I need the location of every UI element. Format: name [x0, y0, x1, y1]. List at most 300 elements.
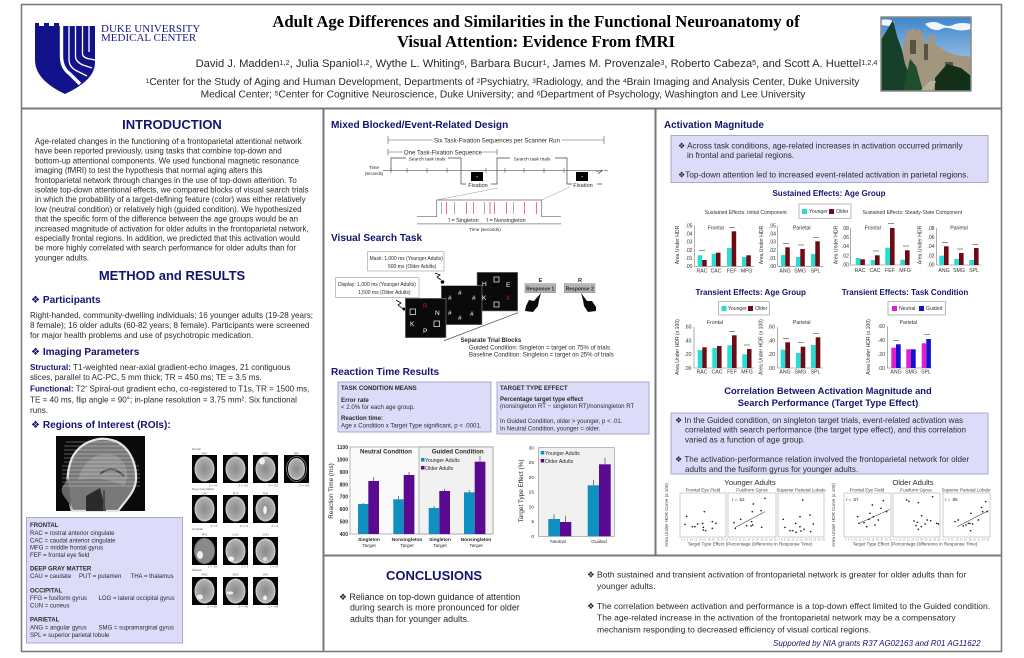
panel: ROI glossary: SPL = superior parietal lobule [30, 633, 110, 639]
display frame: search display: R [423, 304, 428, 310]
bar chart: sustained initial frontal: .00 [685, 264, 693, 270]
heading: transient task condition: Transient Effects: Task Condition [842, 288, 968, 297]
bar chart: transient frontal: MFG [741, 370, 753, 376]
group: frontal scans: Z = +31 [268, 484, 278, 488]
bar chart: sustained steady-state frontal: FEF [885, 268, 895, 274]
legend: younger older: Older [836, 209, 849, 215]
bar chart: sustained initial parietal: Area Under HDR [759, 225, 765, 264]
panel: task condition means: TASK CONDITION MEANS [341, 385, 417, 392]
bar chart: reaction time: Guided Condition [432, 448, 484, 456]
bar chart: reaction time: 900 [340, 470, 348, 476]
group: parietal scans: ANG [201, 573, 208, 577]
text block: imaging parameters: Structural: T1-weighted near-axial gradient-echo images, 21 contiguous [30, 363, 290, 372]
heading: visual search task: Visual Search Task [331, 233, 422, 244]
panel: ROI glossary: OCCIPITAL [30, 588, 62, 594]
heading: reaction time results: Reaction Time Results [331, 367, 439, 378]
bar chart: reaction time: Older Adults [425, 466, 454, 472]
text block: imaging parameters: Functional: T2* Spiral-out gradient echo, co-registered to T1s, TR = 1500 ms, [30, 384, 309, 394]
bar chart: reaction time: 500 [340, 520, 348, 526]
group: deep gray matter scans: CAU [202, 492, 207, 496]
panel: ROI glossary: PARIETAL [30, 618, 60, 624]
bar chart: sustained initial parietal: SMG [794, 269, 806, 275]
bar chart: reaction time: Neutral Condition [360, 448, 412, 456]
chart titles: scatter groups: Older Adults [892, 478, 934, 487]
bar chart: transient parietal task condition: .00 [878, 366, 885, 372]
bar chart: sustained steady-state parietal: SPL [969, 268, 979, 274]
group: frontal scans: FEF [294, 451, 299, 455]
bar chart: reaction time: Target [362, 543, 376, 549]
bar chart: sustained initial parietal: .05 [769, 224, 776, 230]
text block: introduction [35, 137, 309, 262]
panel: ROI glossary: CAU = caudate [30, 574, 72, 580]
panel: target type effect: (nonsingleton RT − singleton RT)/nonsingleton RT [500, 404, 634, 410]
panel: ROI glossary: CAC = caudal anterior cingulate [30, 538, 116, 544]
heading: sustained effects: Sustained Effects: Age Group [772, 189, 886, 198]
icon: left hand pressing [525, 293, 541, 312]
bar chart: sustained initial frontal: .05 [685, 224, 693, 230]
heading: introduction: INTRODUCTION [122, 117, 222, 132]
text block: imaging parameters: TE = 40 ms, flip angle = 90°; in-plane resolution = 3.75 mm2. Six functional [30, 396, 297, 404]
panel: ROI glossary: FEF = frontal eye field [30, 553, 89, 559]
bar chart: target type effect: 5 [531, 519, 534, 525]
icon: right hand pressing [581, 293, 596, 312]
bar chart: sustained initial frontal [675, 224, 754, 275]
chart titles: scatter groups: Younger Adults [724, 478, 776, 487]
heading: correlation: Search Performance (Target Type Effect) [738, 397, 918, 408]
bar chart: transient parietal age: .40 [768, 338, 775, 344]
legend: transient task condition: Neutral [899, 306, 915, 312]
diagram: visual search task sequence: Response 1 [526, 286, 555, 292]
diagram: visual search task sequence [336, 252, 614, 358]
diagram: mixed blocked event-related timeline: Time [369, 165, 379, 170]
diagram: visual search task sequence: 500 ms (Older Adults) [388, 264, 437, 270]
bar chart: transient frontal [675, 319, 754, 376]
text block: conclusions left: ❖ Reliance on top-down guidance of attention [339, 592, 520, 602]
bar chart: target type effect: Neutral [550, 539, 566, 545]
panel: task condition means: < 2.0% for each age group. [341, 404, 415, 411]
bar chart: transient frontal: .00 [684, 366, 692, 372]
heading: correlation [724, 385, 932, 408]
bar chart: reaction time: Nonsingleton [461, 537, 491, 543]
bar chart: sustained steady-state parietal: .06 [927, 235, 935, 241]
bar chart: sustained initial parietal: ANG [779, 269, 791, 275]
panel: ROI glossary: DEEP GRAY MATTER [30, 566, 92, 572]
legend: transient age group: Older [755, 306, 768, 312]
bar chart: sustained initial parietal: .04 [769, 232, 776, 238]
scatter plots: younger adults: Target Type Effect (Percentage Difference in Response Time) [688, 542, 813, 546]
text block: conclusions right: The age-related increase in the activation of the frontoparietal network may be a compensatory [597, 612, 956, 622]
bar chart: reaction time: Target [469, 543, 483, 549]
bar chart: transient frontal: Area Under HDR (x 100) [675, 319, 681, 375]
bar chart: sustained initial frontal: RAC [697, 269, 708, 275]
bar chart: transient parietal age: ANG [779, 370, 791, 376]
group: frontal scans: Z = +33 [238, 484, 248, 488]
heading: regions of interest: ❖ Regions of Interest (ROIs): [31, 420, 171, 431]
bar chart: sustained steady-state parietal [918, 225, 981, 274]
diagram: mixed blocked event-related timeline: + [476, 174, 479, 179]
bar chart: transient parietal task condition: SMG [905, 370, 917, 376]
text block: conclusions left [339, 592, 520, 624]
diagram: mixed blocked event-related timeline: ↿= Singleton [447, 218, 479, 224]
title: Adult Age Differences and Similarities in the Functional Neuroanatomy of [272, 12, 800, 31]
panel: ROI glossary: RAC = rostral anterior cingulate [30, 531, 115, 537]
text block: introduction: have been reported previously, using tasks that combine top-down and [35, 147, 282, 156]
bar chart: transient parietal age: SMG [795, 370, 806, 376]
group: deep gray matter scans [192, 487, 278, 528]
callout: activation summary: in frontal and parietal regions. [687, 151, 794, 160]
callout: correlation summary: ❖ In the Guided condition, on singleton target trials, event-related activation was [675, 416, 963, 425]
diagram: visual search task sequence: Display: 1,000 ms (Younger Adults) [338, 282, 416, 288]
bar chart: sustained initial parietal: Parietal [793, 226, 810, 232]
group: parietal scans: Parietal [192, 568, 202, 572]
bar chart: sustained initial frontal: MFG [741, 269, 752, 275]
panel: target type effect: TARGET TYPE EFFECT [500, 385, 568, 392]
legend: transient age group [719, 302, 769, 315]
text block: conclusions right: ❖ Both sustained and transient activation of frontoparietal network is greater for older adults than for [587, 570, 966, 580]
bar chart: transient parietal age: Area Under HDR (x 100) [759, 319, 765, 375]
bar chart: sustained steady-state frontal: .08 [842, 226, 849, 232]
brain scan grid [192, 447, 309, 609]
bar chart: sustained steady-state parietal: .00 [927, 263, 935, 269]
bar chart: sustained steady-state parietal: .08 [927, 226, 935, 232]
bar chart: transient parietal age: SPL [811, 370, 821, 376]
bar chart: transient parietal task condition: .20 [878, 352, 885, 358]
text block: introduction: younger adults. [35, 253, 89, 262]
bar chart: reaction time: Younger Adults [425, 458, 460, 464]
scatter plots: younger adults: r = .52 [732, 497, 745, 502]
group: deep gray matter scans: THA [263, 492, 268, 496]
icon: Duke shield logo [35, 22, 95, 94]
text block: introduction: especially frontal regions. In addition, we predicted that this activation would [35, 234, 300, 243]
authors: David J. Madden1,2, Julia Spaniol1,2, Wythe L. Whiting6, Barbara Bucur1, James M. Provenzale3, Roberto Cabeza5, and Scott A. Huettel1,2,4 [196, 58, 877, 70]
group: deep gray matter scans: Z = 6 [272, 524, 278, 528]
image: sagittal MRI with slice lines [56, 436, 145, 511]
panel: ROI glossary: ANG = angular gyrus [30, 626, 87, 632]
diagram: mixed blocked event-related timeline [365, 136, 608, 232]
logo text: DUKE UNIVERSITY [101, 23, 200, 35]
callout: activation summary: ❖Top-down attention led to increased event-related activation in parietal regions. [678, 170, 968, 180]
text block: introduction: in which the probability of a target-defining feature (color) was either relatively [35, 195, 306, 204]
bar chart: target type effect: Older Adults [545, 459, 574, 465]
bar chart: target type effect: Target Type Effect (%) [518, 460, 525, 522]
panel: header [35, 12, 971, 100]
heading: transient age group: Transient Effects: Age Group [696, 288, 806, 297]
bar chart: reaction time: Target [400, 543, 414, 549]
bar chart: transient parietal age: .20 [768, 352, 775, 358]
bar chart: transient frontal: FEF [727, 370, 737, 376]
scatter plots: older adults: 4 6 8 10 12 14 16 18 20 22 24 26 4 6 8 10 12 14 16 18 20 22 24 26 4 6 8 10 12 14 16 18 20 22 24 26 [845, 538, 990, 542]
callout: activation summary: ❖ Across task conditions, age-related increases in activation occurred primarily [678, 142, 963, 150]
display frame: third [477, 272, 518, 311]
bar chart: sustained initial frontal: .02 [685, 248, 693, 254]
group: parietal scans: SMG [232, 573, 239, 577]
group: deep gray matter scans: PUT [233, 492, 239, 496]
group: frontal scans: CAC [233, 451, 238, 455]
bar chart: target type effect: 0 [531, 534, 534, 540]
text block: imaging parameters: runs. [30, 406, 48, 415]
affiliations: Medical Center; 5Center for Cognitive Neuroscience, Duke University; and 6Department of Psychology, Washington and Lee University [201, 90, 806, 100]
group: deep gray matter scans: Deep Gray Matter [192, 487, 214, 491]
group: occipital scans: LOG [233, 532, 238, 536]
chart labels: sustained components: Sustained Effects: Initial Component [705, 210, 787, 216]
text block: conclusions left: during search is more pronounced for older [350, 602, 520, 612]
diagram: mixed blocked event-related timeline: (seconds) [365, 171, 384, 176]
group: parietal scans: Z = +45 [268, 605, 278, 609]
bar chart: transient frontal: .20 [684, 352, 692, 358]
panel: ROI glossary: LOG = lateral occipital gyrus [98, 596, 175, 602]
panel: conclusions [339, 568, 990, 648]
panel: right column [664, 120, 991, 547]
title: Visual Attention: Evidence From fMRI [397, 32, 675, 51]
scatter plots: younger adults [664, 483, 826, 547]
bar chart: sustained steady-state parietal: ANG [938, 268, 950, 274]
diagram: visual search task sequence: Mask: 1,000 ms (Younger Adults) [370, 256, 443, 262]
group: occipital scans: Z = +6 [270, 564, 278, 568]
text block: participants [30, 311, 313, 340]
bar chart: sustained steady-state frontal: Frontal [865, 226, 881, 232]
bar chart: sustained steady-state frontal: Area Under HDR [834, 225, 840, 264]
diagram: mixed blocked event-related timeline: One Task-Fixation Sequence [404, 150, 483, 156]
text block: introduction: low (neutral condition) or relatively high (guided condition). We hypothesized [35, 205, 302, 214]
bar chart: transient parietal task condition: ANG [890, 370, 902, 376]
bar chart: sustained steady-state frontal [834, 224, 911, 274]
bar chart: sustained steady-state frontal: .02 [842, 254, 849, 260]
display frame: search display: K [410, 321, 415, 328]
bar chart: target type effect: 20 [529, 475, 534, 481]
bar chart: transient frontal: RAC [697, 370, 708, 376]
bar chart: transient frontal: .60 [684, 324, 692, 330]
panel: task condition means: Reaction time: [341, 415, 383, 422]
scatter plots: older adults: Frontal Eye Field [850, 488, 885, 492]
bar chart: sustained steady-state parietal: Area Under HDR [918, 225, 924, 264]
bar chart: sustained initial frontal: CAC [711, 269, 722, 275]
legend: transient task condition: Guided [926, 306, 943, 312]
group: occipital scans [192, 527, 278, 568]
diagram: visual search task sequence: E [539, 278, 543, 284]
scatter plots: older adults: Superior Parietal Lobule [941, 488, 991, 492]
scatter plots: younger adults: 4 6 8 10 12 14 16 18 20 22 24 26 4 6 8 10 12 14 16 18 20 22 24 26 4 6 8 10 12 14 16 18 20 22 24 26 [681, 538, 826, 542]
heading: correlation: Correlation Between Activation Magnitude and [724, 385, 932, 396]
group: frontal scans [192, 447, 309, 488]
text block: introduction: imaging (fMRI) to test the hypothesis that normal aging alters this [35, 166, 263, 175]
bar chart: sustained initial parietal: .01 [769, 256, 776, 262]
affiliations [146, 77, 860, 100]
group: frontal scans: Z = +9 [209, 484, 217, 488]
callout: correlation summary: correlated with search performance (the target type effect), and this correlation [685, 426, 966, 434]
legend: younger older: Younger [809, 209, 828, 215]
scatter plots: older adults: r = .57 [846, 497, 859, 502]
bar chart: sustained initial parietal: SPL [811, 269, 821, 275]
bar chart: sustained initial parietal [759, 224, 823, 275]
callout: activation summary [671, 136, 988, 182]
bar chart: sustained steady-state parietal: .04 [927, 244, 935, 250]
text block: conclusions right: ❖ The correlation between activation and performance is a top-down effect limited to the Guided condition. [587, 601, 990, 611]
display frame: mask [441, 286, 482, 325]
group: parietal scans [192, 568, 278, 609]
diagram: mixed blocked event-related timeline: Fixation [573, 183, 593, 189]
bar chart: transient parietal age: .60 [768, 324, 775, 330]
bar chart: sustained initial frontal: FEF [727, 269, 737, 275]
legend: transient age group: Younger [728, 306, 747, 312]
bar chart: sustained initial frontal: Frontal [708, 226, 724, 232]
display frame: search display: N [435, 310, 440, 317]
display frame: third: K [482, 295, 487, 302]
panel: left column [26, 117, 313, 643]
panel: ROI glossary: THA = thalamus [130, 574, 174, 580]
text block: introduction: isolate top-down attentional effects, we compared blocks of visual search trials [35, 186, 309, 194]
group: parietal scans: Z = +50 [207, 605, 217, 609]
diagram: mixed blocked event-related timeline: Six Task-Fixation Sequences per Scanner Run [434, 138, 560, 144]
panel: middle column [328, 120, 649, 549]
scatter plots: younger adults: Area Under HDR Curve (x 100) [664, 483, 669, 547]
bar chart: sustained initial frontal: Area Under HDR [675, 225, 681, 264]
scatter plots: younger adults: Fusiform Gyrus [736, 488, 768, 492]
display frame: mask: # [448, 295, 452, 302]
group: occipital scans: Occipital [192, 527, 203, 531]
bar chart: reaction time: 600 [340, 507, 348, 513]
bar chart: reaction time: 800 [340, 482, 348, 488]
callout: correlation summary: ❖ The activation-performance relation involved the frontoparietal network for older [675, 455, 969, 464]
heading: mixed design: Mixed Blocked/Event-Related Design [331, 120, 508, 131]
scatter plots: older adults: Fusiform Gyrus [900, 488, 932, 492]
display frame: search display: P [423, 328, 427, 335]
panel: target type effect: In Neutral Condition, younger = older. [500, 426, 601, 432]
group: frontal scans: MFG [262, 451, 269, 455]
bar chart: sustained steady-state frontal: CAC [870, 268, 881, 274]
group: occipital scans: Z = -15 [208, 564, 217, 568]
bar chart: sustained initial parietal: .02 [769, 248, 776, 254]
display frame: third: E [506, 282, 511, 289]
text block: imaging parameters [30, 363, 309, 415]
group: frontal scans: Frontal [192, 447, 201, 451]
scatter plots: older adults: r = .86 [945, 497, 958, 502]
scatter plots: older adults: Target Type Effect (Percentage Difference in Response Time) [853, 542, 978, 546]
group: parietal scans: SPL [263, 573, 269, 577]
diagram: visual search task sequence: Baseline Condition: Singleton = target on 25% of trials [469, 352, 614, 358]
text block: introduction: increased magnitude of activation for older adults in the frontoparietal network, [35, 224, 309, 233]
text block: participants: Right-handed, community-dwelling individuals; 16 younger adults (19-28 years; [30, 311, 313, 320]
group: frontal scans: RAC [202, 451, 207, 455]
bar chart: reaction time: 1100 [337, 445, 348, 451]
group: frontal scans: Z = +45 [299, 484, 309, 488]
bar chart: transient parietal task condition: .60 [878, 324, 885, 330]
diagram: visual search task sequence: Guided Condition: Singleton = target on 75% of trials [469, 346, 610, 352]
heading: participants: ❖ Participants [31, 295, 101, 306]
bar chart: transient frontal: CAC [712, 370, 723, 376]
group: parietal scans: Z = +48 [238, 605, 248, 609]
bar chart: reaction time [328, 445, 493, 549]
text block: conclusions left: adults than for younger adults. [350, 614, 469, 624]
callout: correlation summary: varied as a function of age group. [685, 436, 805, 444]
panel: ROI glossary: FRONTAL [30, 523, 59, 529]
bar chart: sustained steady-state frontal: MFG [899, 268, 911, 274]
bar chart: target type effect: 30 [529, 446, 534, 452]
panel: ROI glossary [26, 518, 182, 643]
bar chart: sustained initial frontal: .04 [685, 232, 693, 238]
bar chart: transient parietal age: .00 [768, 366, 775, 372]
bar chart: sustained steady-state frontal: .04 [842, 244, 849, 250]
bar chart: reaction time: 400 [340, 532, 348, 538]
panel: task condition means [338, 382, 491, 432]
title [272, 12, 800, 51]
diagram: visual search task sequence: R [578, 278, 582, 284]
display frame: mask: # [470, 311, 474, 318]
diagram: mixed blocked event-related timeline: ↿= Nonsingleton [485, 218, 526, 224]
bar chart: reaction time: 700 [340, 495, 348, 501]
photo: Duke chapel building [881, 17, 971, 91]
bar chart: transient parietal task condition: SPL [921, 370, 931, 376]
legend: transient task condition [888, 302, 945, 315]
bar chart: sustained steady-state frontal: .00 [842, 263, 849, 269]
text block: imaging parameters: slices, parallel to AC-PC, 5 mm thick; TR = 450 ms; TE = 3.5 ms. [30, 373, 262, 382]
bar chart: sustained steady-state parietal: .02 [927, 254, 935, 260]
group: occipital scans: CUN [262, 532, 269, 536]
bar chart: target type effect: Guided [591, 539, 607, 545]
panel: task condition means: Error rate [341, 397, 369, 404]
bar chart: transient parietal age [759, 319, 823, 376]
heading: imaging parameters: ❖ Imaging Parameters [31, 347, 140, 358]
bar chart: sustained steady-state parietal: SMG [953, 268, 965, 274]
bar chart: transient parietal task condition: Area Under HDR (x 100) [866, 319, 872, 375]
legend: younger older [799, 204, 851, 218]
diagram: visual search task sequence: Response 2 [566, 286, 594, 292]
panel: ROI glossary: CUN = cuneus [30, 604, 70, 610]
diagram: mixed blocked event-related timeline: Search task trials [514, 156, 551, 162]
bar chart: transient frontal: .40 [684, 338, 692, 344]
text block: introduction: Age-related changes in the functioning of a frontoparietal attentional network [35, 137, 302, 146]
text block: participants: for major health problems and use of psychotropic medication. [30, 331, 253, 340]
text block: conclusions right: mechanism responding to decreased efficiency of visual cortical regions. [597, 624, 871, 634]
display frame: third: H [482, 281, 487, 288]
panel: ROI glossary: MFG = middle frontal gyrus [30, 546, 103, 552]
diagram: mixed blocked event-related timeline: Search task trials [409, 156, 446, 162]
bar chart: reaction time: Target [433, 543, 447, 549]
bar chart: transient parietal task condition: .40 [878, 338, 885, 344]
bar chart: sustained initial frontal: .03 [685, 240, 693, 246]
text block: introduction: that the specific form of the difference between the age groups would be an [35, 215, 298, 224]
text block: conclusions right [587, 570, 990, 634]
bar chart: sustained steady-state frontal: RAC [855, 268, 866, 274]
panel: task condition means: Age x Condition x Target Type significant, p < .0001. [341, 422, 482, 430]
text block: conclusions right: younger adults. [597, 581, 655, 591]
panel: ROI glossary: SMG = supramarginal gyrus [98, 626, 174, 632]
display frame: mask: # [458, 315, 462, 322]
chart labels: sustained components: Sustained Effects: Steady-State Component [863, 210, 963, 216]
group: occipital scans: Z = 3 [242, 564, 248, 568]
callout: correlation summary [671, 413, 988, 474]
bar chart: transient parietal task condition: Parietal [900, 320, 917, 326]
bar chart: reaction time: 1000 [337, 458, 348, 464]
bar chart: transient frontal: Frontal [707, 320, 723, 326]
bar chart: reaction time: Reaction Time (ms) [328, 463, 335, 519]
group: deep gray matter scans: Z = +3 [240, 524, 248, 528]
bar chart: reaction time: Singleton [358, 537, 380, 543]
bar chart: target type effect: 25 [529, 460, 534, 466]
diagram: visual search task sequence: Separate Trial Blocks [460, 338, 522, 344]
panel: target type effect: Percentage target type effect [500, 397, 583, 403]
text block: introduction: be more highly correlated with search performance for older adults than for [35, 244, 296, 253]
chart labels: sustained components [705, 210, 963, 216]
group: deep gray matter scans: Z = 6 [211, 524, 217, 528]
scatter plots: older adults [831, 483, 991, 547]
text block: participants: 8 female); 16 older adults (60-82 years; 8 female). Participants were screened [30, 321, 309, 330]
display frame: third: X [506, 295, 511, 302]
bar chart: transient parietal age: Parietal [793, 320, 810, 326]
heading: conclusions: CONCLUSIONS [386, 568, 482, 583]
bar chart: target type effect [518, 446, 614, 545]
heading: method and results: METHOD and RESULTS [99, 268, 246, 283]
bar chart: target type effect: 10 [529, 504, 534, 510]
